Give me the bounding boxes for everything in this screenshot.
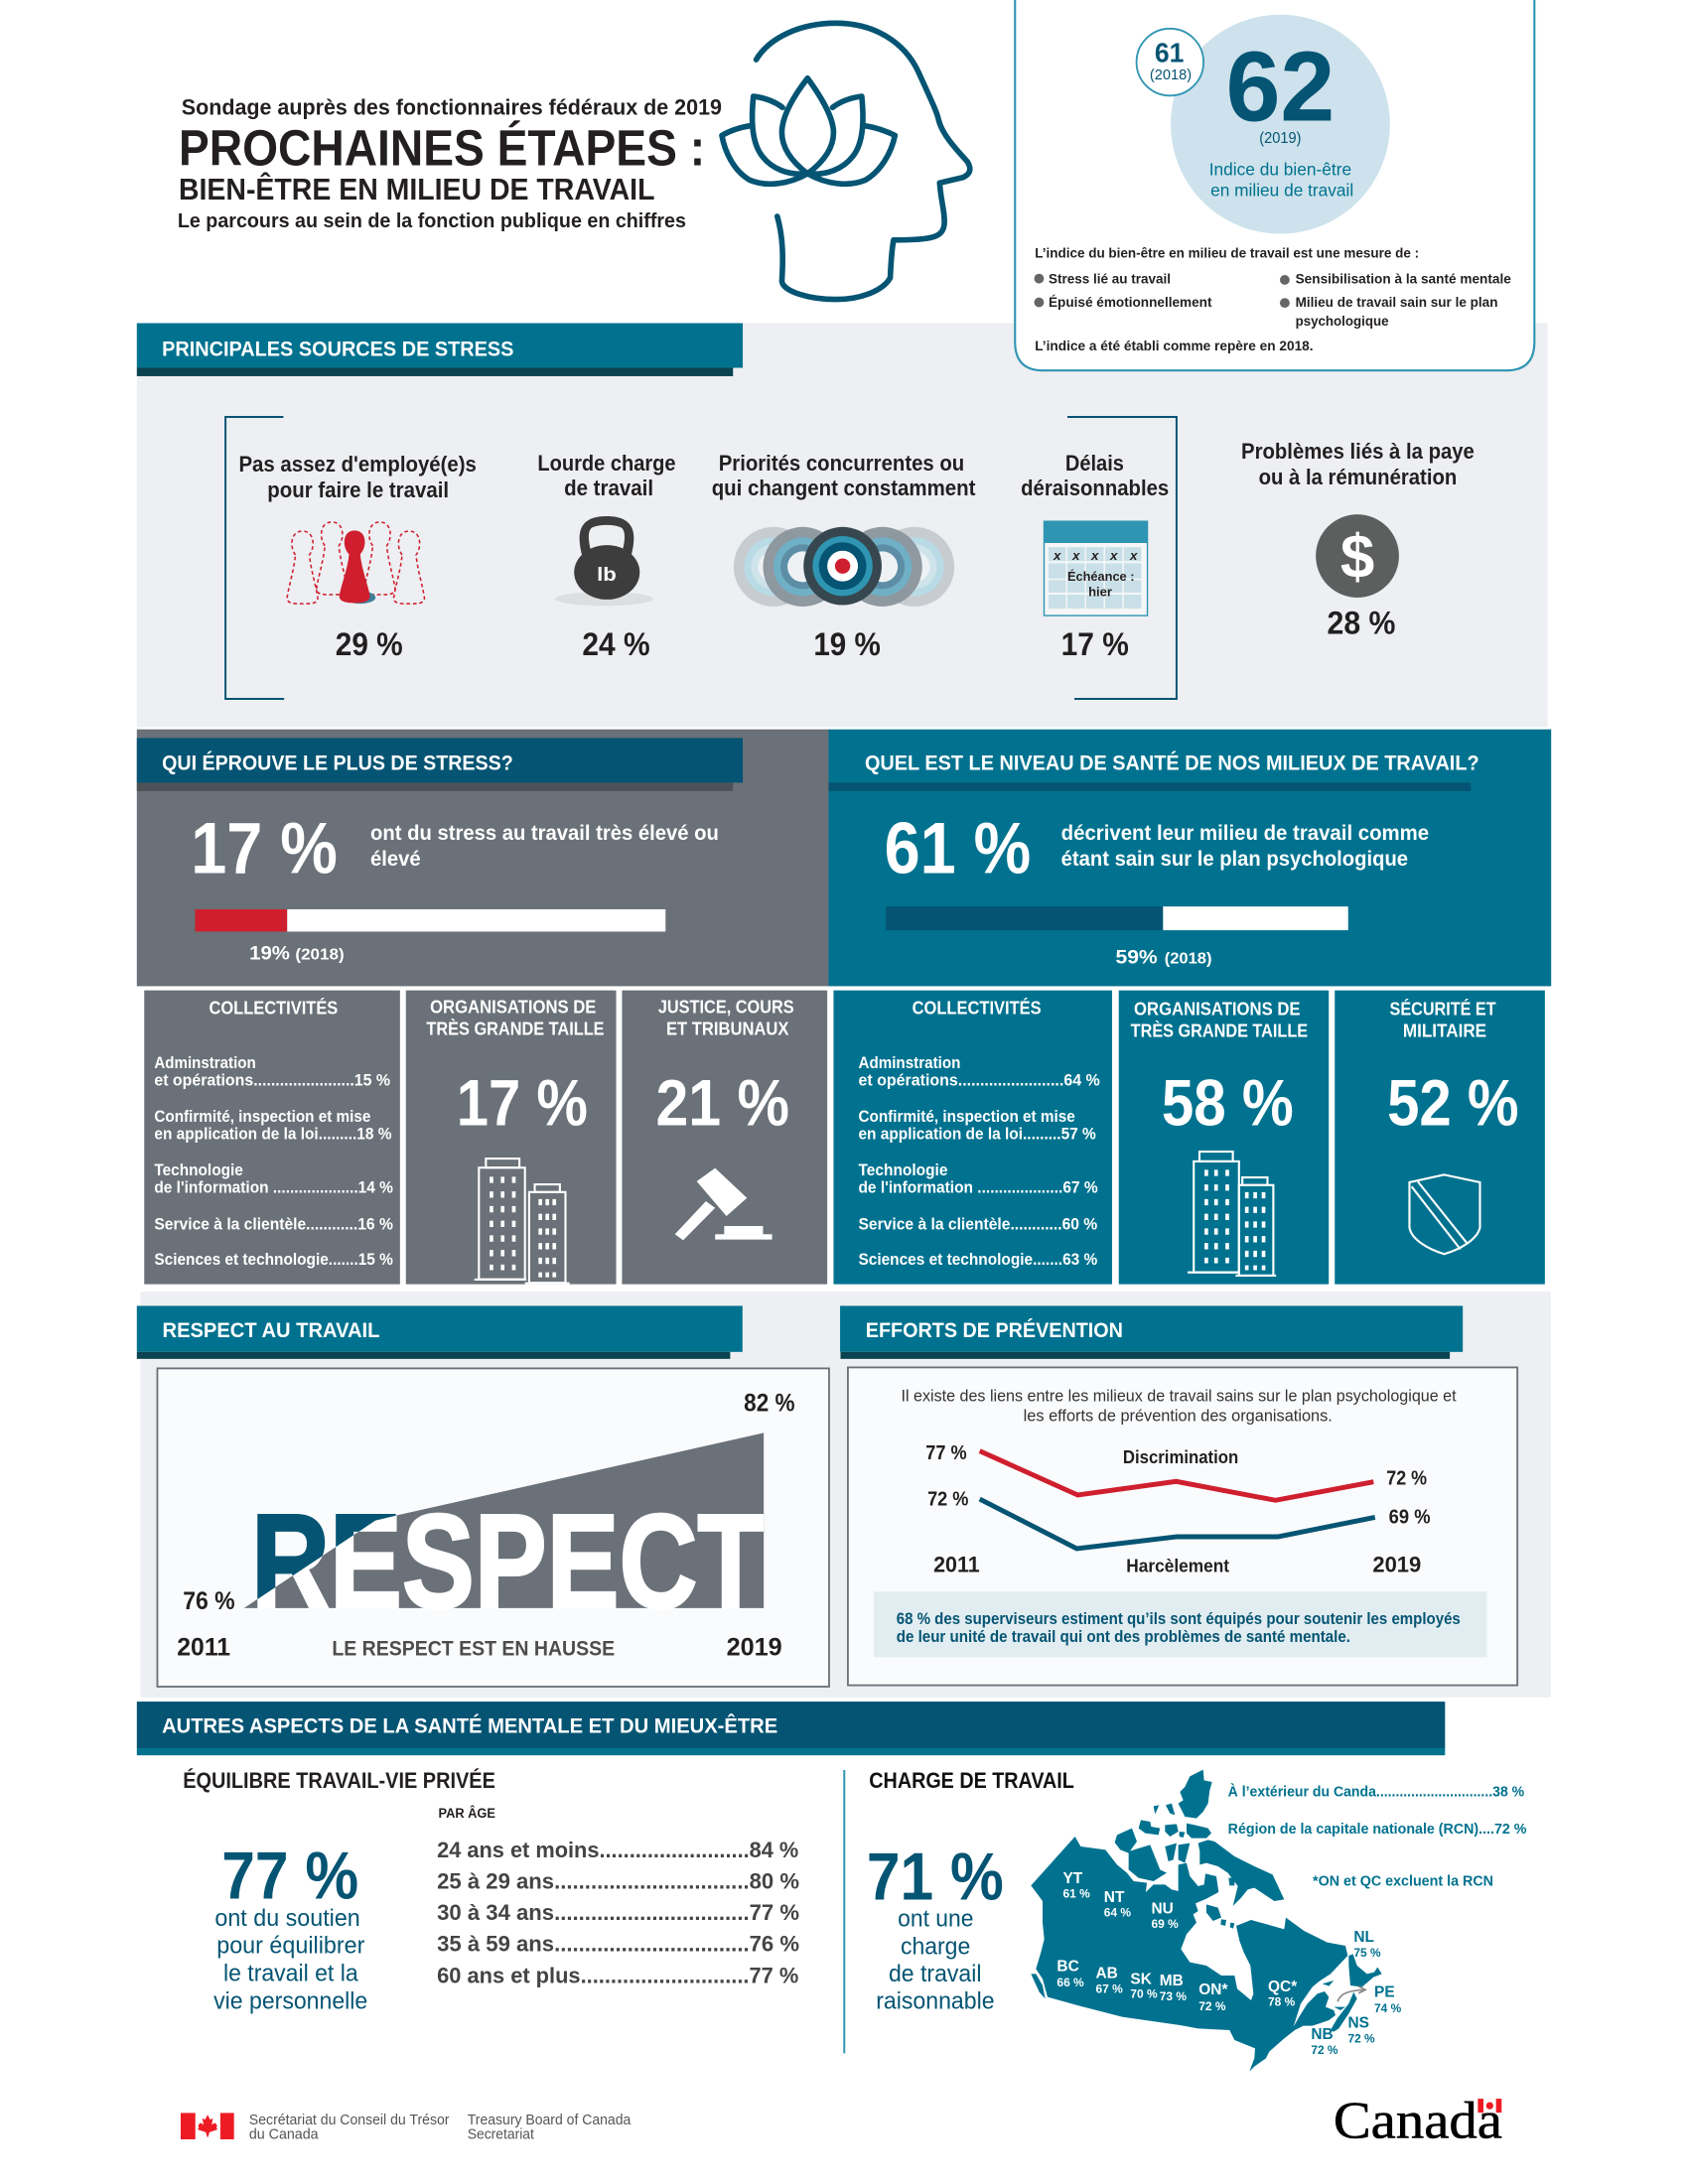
- index definition list: L’indice a été établi comme repère en 2018.: [1035, 338, 1314, 353]
- respect word: [257, 1513, 765, 1608]
- icon: Canadian flag: [181, 2113, 234, 2139]
- map labels inside: 61 %: [1062, 1887, 1090, 1901]
- index definition list: Milieu de travail sain sur le plan: [1296, 294, 1497, 310]
- panel: stress large organizations: [406, 991, 617, 1285]
- panel: healthy large organizations: 58 %: [1162, 1066, 1294, 1140]
- panel: healthy large organizations: [1119, 991, 1329, 1285]
- stress item: understaffed: Pas assez d'employé(e)s: [238, 452, 477, 477]
- callout: 68 % des superviseurs estiment qu’ils sont équipés pour soutenir les employés: [897, 1609, 1461, 1628]
- icon: calendar: x: [1053, 548, 1061, 563]
- stress item: pay problems: ou à la rémunération: [1259, 465, 1457, 489]
- stat 71 %: charge: [901, 1934, 970, 1961]
- bracket left: [225, 417, 284, 699]
- panel: healthy security and military: [1335, 991, 1545, 1285]
- age table: 25 à 29 ans................................80 %: [437, 1868, 799, 1893]
- list by collectivity: Confirmité, inspection et mise: [858, 1108, 1075, 1126]
- icon: calendar: x: [1071, 548, 1080, 563]
- heading: QUEL EST LE NIVEAU DE SANTÉ DE NOS MILIEUX DE TRAVAIL?: [865, 752, 1479, 775]
- stat 71 %: [867, 1840, 1004, 2014]
- list by collectivity: Service à la clientèle............16 %: [154, 1215, 393, 1233]
- map labels inside: ON*: [1198, 1981, 1227, 1998]
- region notes: À l’extérieur du Canda..............................38 %: [1228, 1784, 1524, 1801]
- map labels inside: MB: [1160, 1973, 1184, 1989]
- footer: signature: du Canada: [249, 2126, 319, 2142]
- stat description: décrivent leur milieu de travail comme: [1061, 822, 1429, 845]
- list by collectivity: [154, 1054, 393, 1269]
- title block: BIEN-ÊTRE EN MILIEU DE TRAVAIL: [179, 173, 654, 206]
- title block: [178, 95, 722, 232]
- index definition list: Stress lié au travail: [1049, 270, 1171, 286]
- list by collectivity: Sciences et technologie.......15 %: [154, 1251, 393, 1269]
- divider: [843, 1770, 845, 2053]
- heading: autres aspects: [137, 1702, 1445, 1755]
- age table: PAR ÂGE: [439, 1804, 495, 1821]
- map of Canada: [1031, 1770, 1402, 2072]
- panel: stress large organizations: TRÈS GRANDE TAILLE: [426, 1018, 605, 1038]
- stress item: understaffed: pour faire le travail: [267, 478, 449, 502]
- map labels inside: 70 %: [1130, 1986, 1158, 2000]
- line labels: 2019: [1372, 1552, 1421, 1576]
- list by collectivity: et opérations........................64 %: [858, 1071, 1100, 1089]
- arrow: PE pointer: [1337, 1986, 1365, 2001]
- map labels outside: PE: [1374, 1984, 1395, 2001]
- region notes: Région de la capitale nationale (RCN)....72 %: [1228, 1822, 1526, 1838]
- list by collectivity: Adminstration: [154, 1054, 256, 1072]
- comparison 2018: (2018): [295, 946, 345, 963]
- icon: kettlebell: [555, 516, 653, 606]
- line: harassment: [980, 1499, 1375, 1549]
- stress item: understaffed: 29 %: [336, 626, 403, 662]
- icon: targets: [734, 527, 954, 607]
- icon: gavel: [675, 1168, 773, 1240]
- line labels: 2011: [933, 1552, 980, 1576]
- panel: healthy large organizations: TRÈS GRANDE TAILLE: [1131, 1021, 1308, 1041]
- list by collectivity: en application de la loi.........57 %: [858, 1126, 1096, 1144]
- index definition list: L’indice du bien-être en milieu de travail est une mesure de :: [1035, 244, 1419, 260]
- comparison 2018: [1115, 947, 1212, 969]
- bar: stress: [195, 909, 665, 931]
- stress item: workload: 24 %: [582, 626, 650, 662]
- index definition list: Sensibilisation à la santé mentale: [1296, 270, 1511, 286]
- map labels outside: NB: [1311, 2026, 1334, 2043]
- icon: head with lotus: [722, 23, 970, 300]
- comparison 2018: 19%: [249, 942, 290, 964]
- stress item: workload: de travail: [564, 476, 653, 500]
- footer: signature: [181, 2113, 632, 2142]
- stress item: changing priorities: 19 %: [813, 626, 881, 662]
- panel: healthy security and military: 52 %: [1387, 1066, 1519, 1140]
- icon: calendar: Échéance :: [1067, 569, 1134, 584]
- age table: 24 ans et moins.........................84 %: [437, 1838, 798, 1862]
- line labels: 72 %: [927, 1489, 968, 1511]
- stress item: understaffed: [238, 452, 477, 662]
- icon: calendar: x: [1109, 548, 1118, 563]
- list by collectivity: de l'information ....................14 %: [154, 1179, 393, 1197]
- panel: healthy collectivities: COLLECTIVITÉS: [913, 998, 1042, 1019]
- map labels inside: 69 %: [1151, 1917, 1179, 1931]
- panel: work-life balance: [183, 1768, 799, 2014]
- chart labels: 76 %: [183, 1587, 235, 1615]
- stat 71 %: 71 %: [867, 1840, 1004, 1914]
- panel: stress justice: ET TRIBUNAUX: [666, 1018, 789, 1038]
- heading: principales sources de stress: [137, 324, 743, 376]
- title block: Sondage auprès des fonctionnaires fédéraux de 2019: [182, 95, 722, 120]
- stat 77 %: 77 %: [221, 1840, 358, 1914]
- age table: [437, 1804, 799, 1987]
- footer: Canada wordmark: Canada: [1334, 2090, 1502, 2149]
- line labels: Harcèlement: [1126, 1555, 1229, 1575]
- map labels inside: 66 %: [1056, 1976, 1084, 1989]
- stat description: étant sain sur le plan psychologique: [1061, 848, 1408, 871]
- map labels inside: BC: [1056, 1958, 1079, 1975]
- stress item: changing priorities: Priorités concurrentes ou: [719, 451, 964, 476]
- map labels inside: AB: [1096, 1965, 1118, 1981]
- chart labels: [177, 1390, 795, 1662]
- map labels inside: [1056, 1870, 1297, 2013]
- respect word: RESPECT: [251, 1486, 764, 1636]
- icon: calendar: x: [1129, 548, 1138, 563]
- map labels inside: NT: [1104, 1889, 1125, 1906]
- panel: healthy security and military: MILITAIRE: [1403, 1021, 1486, 1041]
- region notes: [1228, 1784, 1526, 1890]
- panel: work-life balance: ÉQUILIBRE TRAVAIL-VIE PRIVÉE: [183, 1768, 495, 1793]
- stat 71 %: raisonnable: [876, 1987, 995, 2014]
- index value 2019: [1209, 33, 1353, 200]
- heading: QUI ÉPROUVE LE PLUS DE STRESS?: [162, 752, 513, 775]
- panel: stress justice: JUSTICE, COURS: [658, 997, 794, 1018]
- map labels inside: SK: [1130, 1971, 1153, 1987]
- stat description: [1061, 822, 1429, 871]
- age table: 30 à 34 ans................................77 %: [437, 1900, 799, 1925]
- footer: signature: Treasury Board of Canada: [468, 2113, 632, 2128]
- panel: stress collectivities: COLLECTIVITÉS: [210, 998, 338, 1019]
- footer: signature: Secrétariat du Conseil du Trésor: [249, 2113, 450, 2128]
- index value 2019: en milieu de travail: [1210, 180, 1353, 200]
- map labels inside: QC*: [1268, 1979, 1297, 1995]
- respect word: RESPECT: [251, 1486, 764, 1636]
- line: discrimination: [980, 1451, 1373, 1500]
- map labels outside: 72 %: [1311, 2043, 1338, 2057]
- age table: 60 ans et plus............................77 %: [437, 1963, 798, 1987]
- panel: stress large organizations: 17 %: [457, 1066, 588, 1140]
- stress item: workload: [537, 451, 676, 662]
- line labels: Discrimination: [1123, 1446, 1238, 1467]
- stat 77 %: [213, 1840, 367, 2014]
- chart labels: LE RESPECT EST EN HAUSSE: [332, 1638, 615, 1661]
- icon: calendar: hier: [1088, 585, 1112, 599]
- footer: signature: Secretariat: [468, 2126, 534, 2142]
- panel: lower background: [141, 1292, 1551, 1698]
- panel: who experiences most stress: [137, 730, 829, 986]
- heading: autres aspects: AUTRES ASPECTS DE LA SANTÉ MENTALE ET DU MIEUX-ÊTRE: [162, 1714, 777, 1738]
- index value 2019: (2019): [1259, 130, 1302, 147]
- panel: healthy security and military: SÉCURITÉ ET: [1390, 999, 1496, 1020]
- comparison 2018: [249, 942, 345, 964]
- panel: wellbeing index: [1015, 0, 1534, 370]
- line labels: 77 %: [925, 1442, 967, 1464]
- map labels inside: 78 %: [1268, 1995, 1296, 2009]
- map labels outside: NL: [1353, 1929, 1374, 1946]
- heading: efforts de prévention: EFFORTS DE PRÉVENTION: [866, 1319, 1123, 1342]
- map labels outside: 72 %: [1347, 2031, 1375, 2045]
- panel: respect chart: [157, 1368, 829, 1687]
- list by collectivity: Service à la clientèle............60 %: [858, 1215, 1097, 1233]
- intro text: les efforts de prévention des organisations.: [1024, 1406, 1333, 1425]
- comparison 2018: (2018): [1165, 951, 1212, 968]
- bracket right: [1067, 417, 1177, 699]
- index value 2019: 62: [1226, 33, 1335, 143]
- index circle 2018: 61: [1155, 37, 1184, 68]
- panel: workload: CHARGE DE TRAVAIL: [869, 1768, 1074, 1793]
- panel: healthy large organizations: ORGANISATIONS DE: [1134, 999, 1301, 1020]
- title block: PROCHAINES ÉTAPES :: [179, 120, 705, 177]
- heading: [829, 738, 1483, 791]
- stat description: élevé: [370, 848, 421, 871]
- icon: dollar: [1316, 514, 1399, 598]
- index definition list: Épuisé émotionnellement: [1049, 294, 1212, 310]
- stat 77 %: pour équilibrer: [216, 1932, 364, 1959]
- stress item: pay problems: [1241, 439, 1475, 640]
- intro text: Il existe des liens entre les milieux de travail sains sur le plan psychologique et: [902, 1387, 1457, 1406]
- bar: healthy: [886, 906, 1348, 930]
- title block: Le parcours au sein de la fonction publique en chiffres: [178, 210, 686, 232]
- heading: [137, 738, 743, 791]
- chart labels: 2011: [177, 1634, 230, 1662]
- map labels outside: 75 %: [1353, 1946, 1381, 1960]
- map labels inside: NU: [1151, 1900, 1174, 1917]
- index circle 2019: [1171, 15, 1390, 234]
- panel: workload: [867, 1768, 1526, 2072]
- icon: calendar: [1044, 521, 1148, 615]
- map labels outside: 74 %: [1374, 2001, 1402, 2015]
- callout: de leur unité de travail qui ont des problèmes de santé mentale.: [897, 1627, 1350, 1646]
- list by collectivity: Technologie: [154, 1161, 243, 1179]
- list by collectivity: Confirmité, inspection et mise: [154, 1108, 370, 1126]
- stress item: pay problems: Problèmes liés à la paye: [1241, 439, 1475, 464]
- panel: stress collectivities: [144, 991, 400, 1285]
- chart labels: 2019: [727, 1634, 782, 1662]
- index circle 2018: [1137, 29, 1203, 95]
- stat 17 %: 17 %: [191, 808, 338, 888]
- stat 77 %: ont du soutien: [214, 1905, 360, 1932]
- map labels inside: 72 %: [1198, 1999, 1226, 2013]
- list by collectivity: en application de la loi.........18 %: [154, 1126, 391, 1144]
- area chart 76 to 82: [244, 1433, 764, 1608]
- stress item: workload: Lourde charge: [537, 451, 676, 476]
- callout: [874, 1591, 1487, 1657]
- index value 2019: Indice du bien-être: [1209, 160, 1351, 180]
- comparison 2018: 59%: [1115, 947, 1158, 969]
- panel: stress justice: [622, 991, 827, 1285]
- stat 77 %: vie personnelle: [213, 1987, 367, 2014]
- stress item: changing priorities: qui changent constamment: [712, 476, 976, 500]
- line labels: 69 %: [1389, 1506, 1431, 1528]
- stat description: ont du stress au travail très élevé ou: [370, 822, 719, 845]
- icon: buildings: [1188, 1152, 1276, 1276]
- icon: calendar: x: [1090, 548, 1099, 563]
- stat 77 %: le travail et la: [223, 1960, 358, 1986]
- panel: stress justice: 21 %: [655, 1066, 789, 1140]
- age table: 35 à 59 ans................................76 %: [437, 1932, 799, 1957]
- map labels outside: [1311, 1929, 1402, 2057]
- stress item: deadlines: Délais: [1065, 451, 1124, 476]
- map labels inside: 64 %: [1104, 1906, 1131, 1920]
- index definition list: psychologique: [1296, 313, 1389, 329]
- list by collectivity: et opérations.......................15 %: [154, 1071, 390, 1089]
- map labels outside: NS: [1347, 2014, 1369, 2031]
- list by collectivity: Adminstration: [858, 1054, 960, 1072]
- icon: dollar: $: [1340, 523, 1374, 592]
- intro text: [902, 1387, 1457, 1425]
- chart labels: 82 %: [744, 1390, 795, 1418]
- list by collectivity: Technologie: [858, 1161, 947, 1179]
- stress item: deadlines: déraisonnables: [1021, 476, 1169, 500]
- stress item: pay problems: 28 %: [1328, 605, 1395, 640]
- list by collectivity: [858, 1054, 1100, 1269]
- index circle 2018: (2018): [1150, 68, 1192, 83]
- icon: buildings: [475, 1159, 570, 1284]
- panel: how healthy are our workplaces: [829, 730, 1551, 986]
- map labels inside: 73 %: [1160, 1989, 1187, 2003]
- list by collectivity: Sciences et technologie.......63 %: [858, 1251, 1097, 1269]
- stat 61 %: 61 %: [885, 808, 1031, 888]
- map labels inside: 67 %: [1096, 1981, 1123, 1995]
- stress item: changing priorities: [712, 451, 976, 662]
- map labels inside: YT: [1062, 1870, 1083, 1887]
- index definition list: [1035, 244, 1511, 353]
- stat 71 %: de travail: [889, 1961, 982, 1987]
- panel: prevention chart: [848, 1367, 1517, 1686]
- heading: respect au travail: [137, 1305, 743, 1359]
- stat 71 %: ont une: [898, 1905, 973, 1932]
- line labels: [925, 1442, 1431, 1576]
- heading: efforts de prévention: [840, 1305, 1463, 1359]
- heading: respect au travail: RESPECT AU TRAVAIL: [163, 1319, 380, 1342]
- panel: stress sources background: [137, 324, 1548, 728]
- panel: stress large organizations: ORGANISATIONS DE: [430, 997, 596, 1018]
- region notes: *ON et QC excluent la RCN: [1313, 1874, 1493, 1890]
- heading: principales sources de stress: PRINCIPALES SOURCES DE STRESS: [162, 339, 513, 361]
- stress item: deadlines: 17 %: [1061, 626, 1129, 662]
- icon: kettlebell: lb: [597, 564, 617, 586]
- stat description: [370, 822, 719, 871]
- stress item: deadlines: [1021, 451, 1169, 662]
- icon: pawns: [287, 522, 424, 604]
- list by collectivity: de l'information ....................67 %: [858, 1179, 1098, 1197]
- icon: shield: [1409, 1174, 1479, 1254]
- panel: healthy collectivities: [833, 991, 1112, 1285]
- line labels: 72 %: [1386, 1468, 1427, 1490]
